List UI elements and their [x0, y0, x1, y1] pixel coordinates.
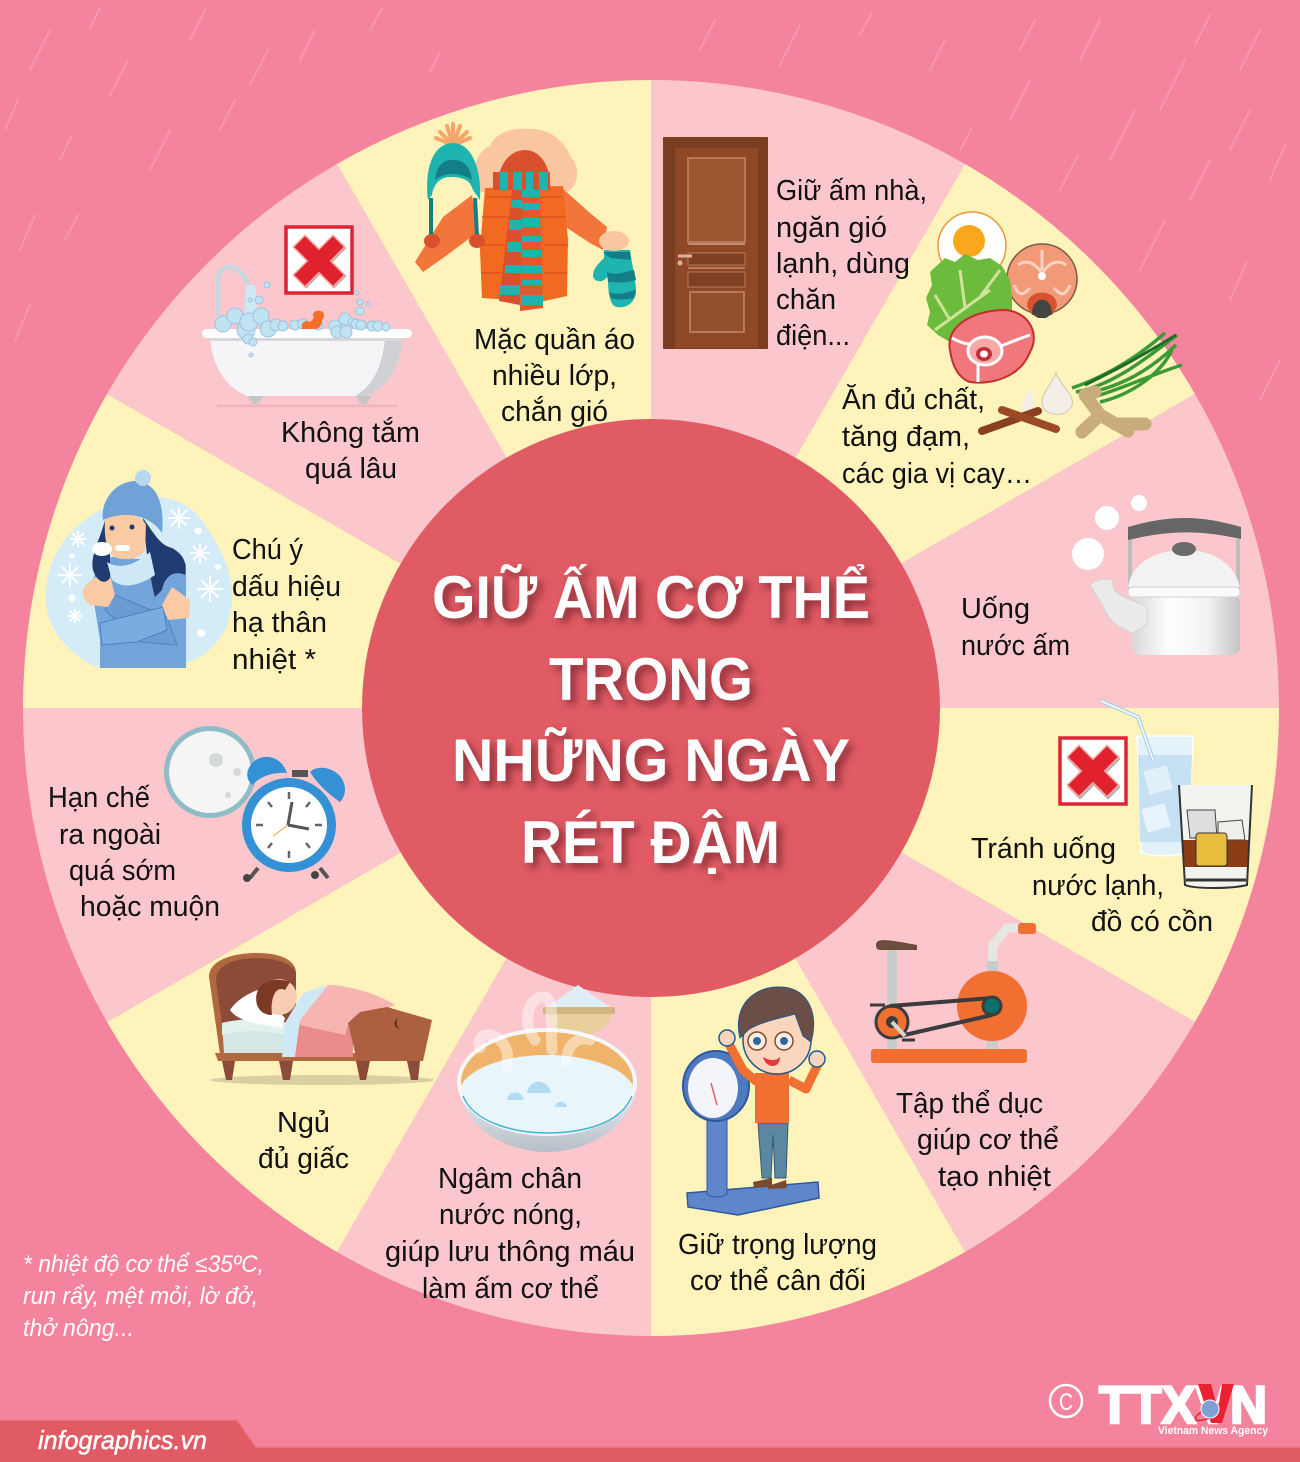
icon: bed: [209, 953, 434, 1085]
text: hypothermia: hạ thân: [232, 607, 327, 639]
text: food: Ăn đủ chất,: [842, 383, 985, 416]
icon: iced drink and whiskey: [1101, 701, 1252, 888]
text: door: [776, 175, 927, 352]
footer band: infographics.vn: [38, 1425, 207, 1455]
footnote: [23, 1251, 264, 1342]
icon: kettle: [1072, 495, 1241, 655]
footnote: * nhiệt độ cơ thể ≤35ºC,: [23, 1251, 264, 1278]
text: exercise: Tập thể dục: [896, 1088, 1043, 1120]
icon: exercise bike: [870, 923, 1036, 1063]
text: door: ngăn gió: [776, 212, 887, 244]
icon: food: [926, 212, 1182, 432]
logo: TTXVN: TTXVN: [1099, 1376, 1267, 1435]
text: sleep: đủ giấc: [258, 1143, 349, 1175]
title: TRONG: [549, 646, 753, 713]
text: door: điện...: [776, 320, 850, 352]
text: go out: ra ngoài: [59, 819, 161, 851]
icon: red cross sign, bath: [286, 227, 352, 293]
text: food: [842, 383, 1032, 490]
icon: red cross sign, drinks: [1060, 738, 1126, 804]
text: sleep: [258, 1107, 349, 1175]
icon: bathtub: [202, 267, 412, 406]
text: warm water: [961, 593, 1070, 662]
text: foot bath: Ngâm chân: [438, 1163, 582, 1195]
text: clothes: Mặc quần áo: [474, 324, 635, 356]
icon: man on a weighing scale: [683, 987, 825, 1215]
text: hypothermia: nhiệt *: [232, 644, 316, 676]
central red circle: [362, 419, 940, 997]
text: go out: hoặc muộn: [80, 891, 220, 923]
logo: TTXVN: C: [1059, 1389, 1073, 1416]
text: foot bath: nước nóng,: [439, 1199, 582, 1231]
text: door: Giữ ấm nhà,: [776, 175, 927, 207]
footnote: thở nông...: [23, 1315, 134, 1342]
text: bath: quá lâu: [305, 453, 397, 485]
text: sleep: Ngủ: [277, 1107, 330, 1139]
text: foot bath: [385, 1163, 635, 1305]
text: go out: Hạn chế: [48, 782, 150, 814]
icon: winter clothes: [415, 124, 636, 311]
text: cold drinks: Tránh uống: [971, 833, 1116, 865]
text: go out: quá sớm: [69, 855, 176, 887]
text: hypothermia: dấu hiệu: [232, 571, 341, 603]
title: RÉT ĐẬM: [521, 809, 780, 876]
text: hypothermia: Chú ý: [232, 534, 303, 566]
text: weight: cơ thể cân đối: [690, 1265, 866, 1297]
text: food: tăng đạm,: [842, 421, 970, 453]
icon: wooden door: [663, 137, 768, 349]
text: exercise: tạo nhiệt: [938, 1161, 1051, 1193]
text: clothes: chắn gió: [501, 395, 608, 428]
title: NHỮNG NGÀY: [452, 727, 850, 794]
logo: TTXVN: Vietnam News Agency: [1158, 1425, 1269, 1437]
text: weight: Giữ trọng lượng: [678, 1229, 877, 1261]
text: go out: [48, 782, 220, 923]
text: bath: Không tắm: [281, 416, 420, 449]
text: cold drinks: đồ có cồn: [1091, 906, 1213, 938]
text: door: lạnh, dùng: [776, 248, 910, 280]
title: GIỮ ẤM CƠ THỂ: [432, 564, 870, 631]
icon: shivering woman: [46, 470, 232, 668]
text: weight: [678, 1229, 877, 1297]
text: cold drinks: nước lạnh,: [1032, 870, 1164, 902]
footnote: run rẩy, mệt mỏi, lờ đở,: [23, 1283, 258, 1310]
text: exercise: giúp cơ thể: [917, 1124, 1059, 1156]
text: bath: [281, 416, 420, 485]
text: foot bath: làm ấm cơ thể: [422, 1273, 599, 1305]
text: door: chăn: [776, 284, 836, 316]
text: hypothermia: [232, 534, 341, 676]
text: cold drinks: [971, 833, 1213, 938]
text: clothes: [474, 324, 635, 428]
icon: moon and alarm clock: [164, 726, 345, 882]
icon: foot bath bowl: [457, 985, 637, 1152]
text: warm water: nước ấm: [961, 630, 1070, 662]
text: foot bath: giúp lưu thông máu: [385, 1236, 635, 1268]
text: food: các gia vị cay…: [842, 458, 1032, 490]
footer band: [0, 1420, 1300, 1462]
title: [432, 564, 870, 876]
text: exercise: [896, 1088, 1059, 1193]
text: warm water: Uống: [961, 593, 1030, 625]
text: clothes: nhiều lớp,: [492, 360, 617, 392]
